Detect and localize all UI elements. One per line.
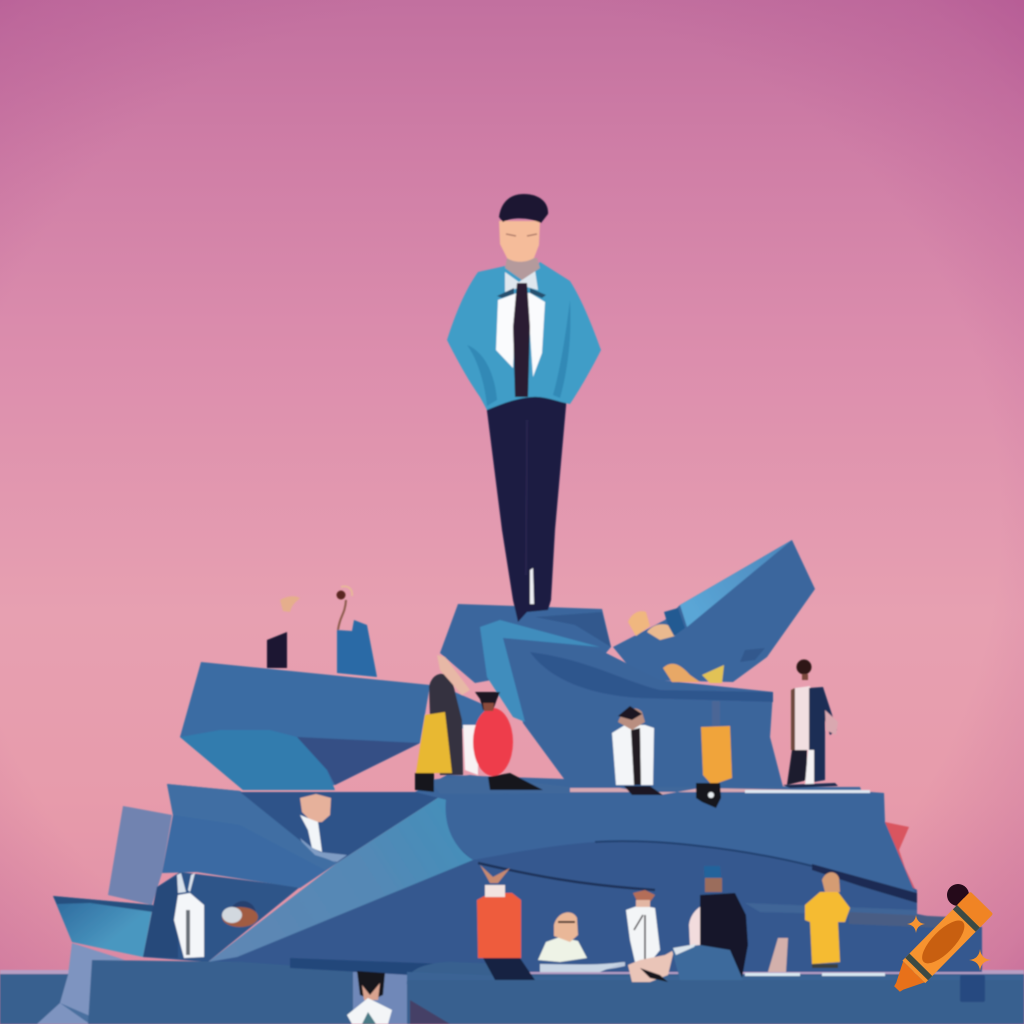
book pile: lavender back page xyxy=(108,806,172,905)
figure: reclining people on upper book xyxy=(628,608,724,683)
book pile: left lower flap xyxy=(53,896,153,957)
book pile: light blue wedge xyxy=(208,792,473,962)
icon: crayon logo xyxy=(886,884,993,1000)
book pile: curved upper flap xyxy=(162,784,447,888)
figure: white coat person xyxy=(612,706,663,795)
neck xyxy=(505,258,540,280)
book pile: page highlights xyxy=(430,775,885,976)
figure: person at bottom centre xyxy=(347,971,392,1024)
figure: person in white with hat xyxy=(626,890,674,982)
figure: person under left flap (top) xyxy=(300,794,347,862)
figure: yellow shirt person xyxy=(805,872,850,968)
figure: person in black vest xyxy=(672,866,748,980)
book pile: light blue ribbon page xyxy=(480,620,600,722)
figure: yellow and dark person xyxy=(415,655,470,792)
figure: red-orange person xyxy=(477,865,535,980)
crayon label xyxy=(916,914,971,970)
hair xyxy=(499,194,548,223)
figure: seated person in white xyxy=(538,912,624,972)
book pile: central main book xyxy=(503,636,783,787)
crayon tip xyxy=(886,961,925,1000)
ground band xyxy=(0,970,1024,1024)
book pile: dark square xyxy=(960,975,985,1002)
leg seam xyxy=(526,420,527,575)
crayon dot xyxy=(947,884,969,906)
red book edge xyxy=(885,822,917,893)
book pile: left tilted book xyxy=(180,662,500,790)
icon: dark bag on ledge xyxy=(696,783,721,808)
figure: red person xyxy=(463,692,543,790)
figure: small pink figure xyxy=(768,938,788,972)
book pile: upper right tilted book xyxy=(613,540,815,682)
figure: left dark person xyxy=(267,596,300,668)
figure: orange person xyxy=(701,701,732,785)
tie xyxy=(513,283,530,397)
face xyxy=(499,221,540,262)
trousers xyxy=(485,395,567,622)
book pile: bottom main block xyxy=(88,958,1024,1024)
crayon cap xyxy=(957,891,993,927)
crayon body xyxy=(902,898,987,983)
jacket fold shadows xyxy=(467,300,571,406)
figure: standing pair on right xyxy=(783,660,838,788)
book pile: lavender lower pages xyxy=(37,943,410,1024)
book pile: lower dark panel xyxy=(205,830,982,972)
book pile: wide middle band xyxy=(440,792,917,903)
trouser gap xyxy=(530,568,534,604)
figure: standing man xyxy=(447,194,601,622)
sparkle large xyxy=(969,949,991,971)
figure: crouching head xyxy=(222,901,258,927)
book pile: third tier top ledge xyxy=(415,775,884,800)
collar and bow xyxy=(505,270,538,292)
book pile: top book xyxy=(440,604,611,683)
jacket xyxy=(447,262,601,410)
eyes xyxy=(506,234,537,236)
figure: white trousers person xyxy=(174,873,204,958)
book pile: dark interior xyxy=(143,872,300,962)
sparkle small xyxy=(907,915,925,933)
shirt xyxy=(496,290,545,377)
crayon stripes xyxy=(905,954,932,980)
figure: left blue person xyxy=(336,586,377,677)
